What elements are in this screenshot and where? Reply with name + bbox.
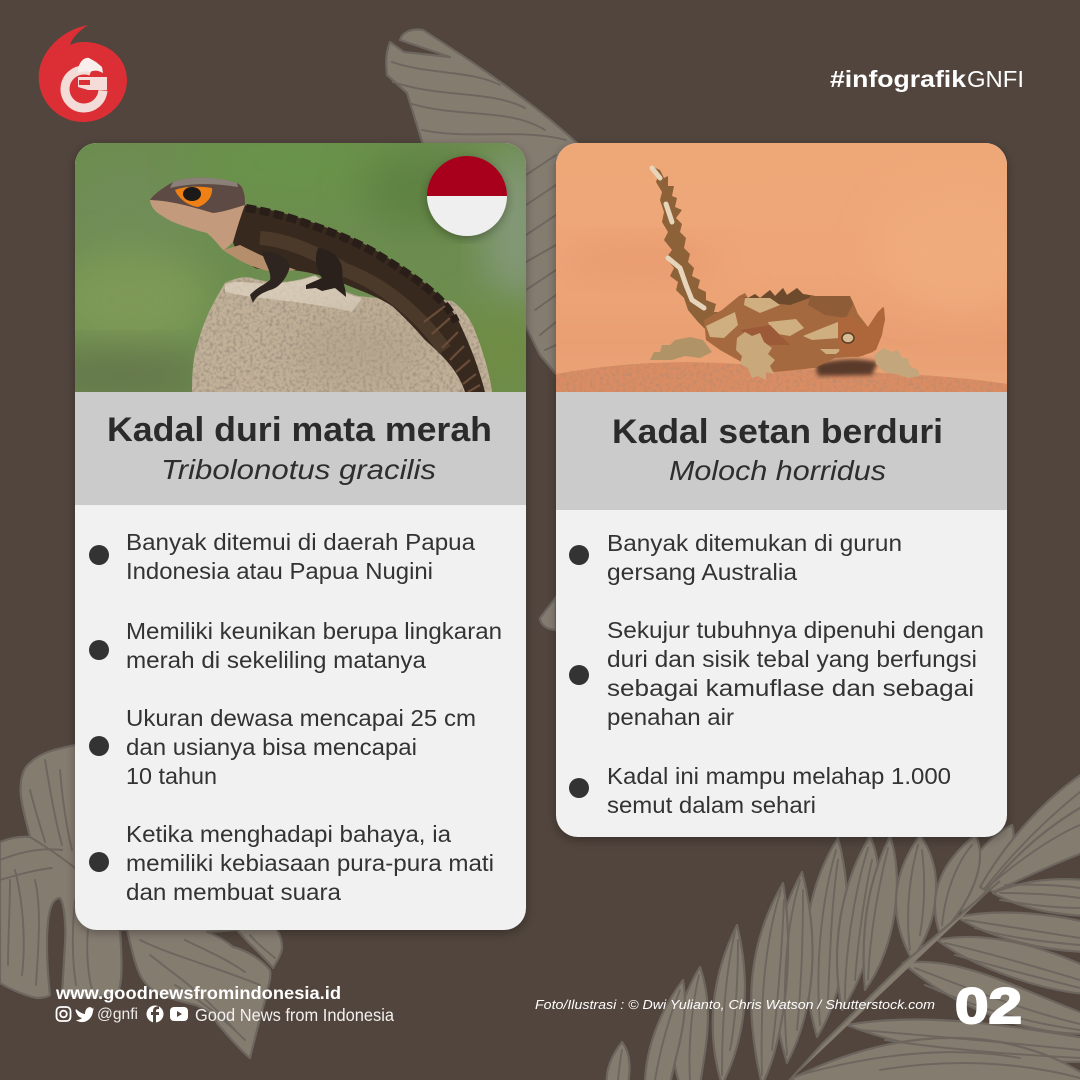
fact: size and age: Ukuran dewasa mencapai 25 cm (126, 705, 476, 731)
footer: website and socials: @gnfi (97, 1006, 138, 1023)
fact: habitat: Banyak ditemui di daerah Papua (126, 529, 476, 555)
footer: website and socials: www.goodnewsfromindonesia.id (55, 983, 341, 1003)
decorative leaf: palm bottom right (607, 772, 1080, 1080)
fact: spines: sebagai kamuflase dan sebagai (607, 675, 974, 701)
hashtag: GNFI (967, 66, 1024, 92)
hashtag: #infografik (830, 66, 966, 92)
panel: right card (550, 143, 1040, 837)
fact: habitat (569, 530, 902, 585)
photo credit: Foto/Ilustrasi : © Dwi Yulianto, Chris Watson / Shutterstock.com (535, 997, 935, 1012)
fact: habitat: gersang Australia (607, 559, 798, 585)
icon: youtube (170, 1007, 188, 1021)
fact: diet: Kadal ini mampu melahap 1.000 (607, 763, 951, 789)
decorative leaf: top banana leaf (386, 29, 600, 630)
fact: habitat: Banyak ditemukan di gurun (607, 530, 902, 556)
skink belly (223, 245, 296, 271)
sand mound (556, 362, 1007, 392)
fact: eye ring: merah di sekeliling matanya (126, 647, 427, 673)
skink eye (175, 187, 212, 207)
icon: facebook (146, 1006, 164, 1023)
skink head (150, 178, 245, 250)
fact: habitat: Indonesia atau Papua Nugini (126, 558, 433, 584)
skink hind leg (306, 248, 346, 297)
fact: size and age: dan usianya bisa mencapai (126, 734, 417, 760)
fact: defense: dan membuat suara (126, 879, 342, 905)
fact: defense: memiliki kebiasaan pura-pura mati (126, 850, 494, 876)
fact: spines (569, 617, 984, 730)
icon: twitter (76, 1007, 94, 1022)
devil shadow (815, 359, 878, 376)
footer: website and socials: Good News from Indonesia (195, 1005, 394, 1025)
fact: eye ring (89, 618, 502, 673)
flag (427, 156, 507, 236)
photo: thorny devil (550, 143, 1040, 392)
devil body (704, 288, 885, 372)
devil front leg (736, 332, 775, 380)
footer: website and socials (55, 983, 394, 1025)
fact: spines: penahan air (607, 704, 734, 730)
title band (75, 392, 526, 505)
title band: Tribolonotus gracilis (161, 454, 436, 485)
devil right leg (874, 348, 920, 378)
fact: spines: Sekujur tubuhnya dipenuhi dengan (607, 617, 984, 643)
fact: size and age (89, 705, 476, 789)
title band: Moloch horridus (669, 455, 886, 486)
fact: diet: semut dalam sehari (607, 792, 816, 818)
fact: defense: Ketika menghadapi bahaya, ia (126, 821, 452, 847)
decorative leaf: monstera left (0, 744, 282, 1058)
skink body and tail (233, 205, 485, 392)
page number: 02 (955, 978, 1022, 1034)
rock (192, 275, 492, 392)
devil head (838, 307, 885, 357)
fact: diet (569, 763, 951, 818)
title band: Kadal setan berduri (612, 413, 943, 451)
title band: Kadal duri mata merah (107, 411, 492, 449)
hashtag (830, 66, 1024, 92)
panel: left card (71, 142, 530, 937)
fact: spines: duri dan sisik tebal yang berfungsi (607, 646, 977, 672)
fact: size and age: 10 tahun (126, 763, 217, 789)
photo: crocodile skink (75, 143, 526, 392)
logo: GNFI (39, 25, 127, 122)
title band (556, 392, 1007, 510)
devil hind leg (650, 337, 712, 360)
fact: habitat (89, 529, 476, 584)
devil tail (654, 168, 718, 329)
fact: defense (89, 821, 494, 905)
skink front leg (250, 252, 290, 303)
fact: eye ring: Memiliki keunikan berupa lingkaran (126, 618, 502, 644)
icon: instagram (56, 1007, 70, 1021)
